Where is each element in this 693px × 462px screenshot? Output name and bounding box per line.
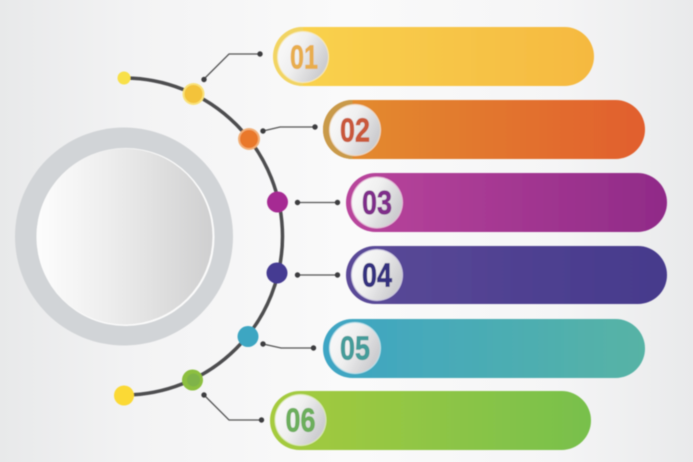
pill 06	[270, 391, 591, 450]
node 06	[182, 370, 203, 390]
pill 04	[346, 246, 667, 304]
node 02	[238, 128, 260, 150]
pill 03	[346, 173, 667, 232]
connector 02	[260, 124, 318, 134]
timeline end dot: top	[118, 72, 130, 84]
number 04: 04	[362, 256, 393, 294]
central circle	[15, 128, 233, 346]
number 01: 01	[290, 38, 318, 76]
connector 01	[201, 51, 263, 82]
node 05	[238, 326, 258, 347]
node 03	[267, 192, 288, 212]
number 03: 03	[362, 184, 392, 221]
pill 01	[273, 27, 594, 86]
connector 03	[295, 200, 340, 205]
connector 05	[260, 341, 316, 351]
curved timeline	[124, 78, 282, 395]
connector 04	[295, 272, 340, 278]
number 05: 05	[340, 330, 370, 366]
pill 02	[323, 100, 645, 159]
node 04	[266, 262, 288, 284]
connector 06	[201, 392, 264, 423]
number 02: 02	[340, 112, 370, 148]
pill 05	[323, 319, 645, 378]
node 01	[182, 83, 204, 105]
number 06: 06	[286, 402, 316, 438]
timeline end dot: bottom	[114, 386, 134, 406]
